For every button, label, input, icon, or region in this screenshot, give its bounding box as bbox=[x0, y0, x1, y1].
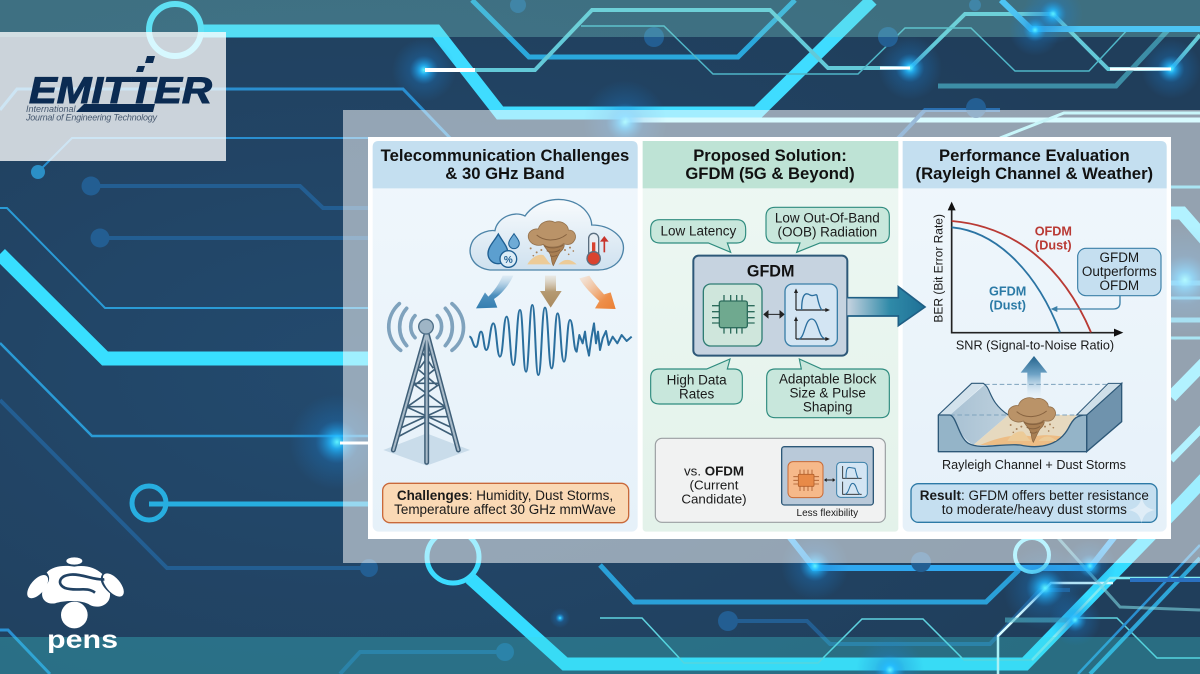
panel: proposed solution bbox=[643, 141, 898, 532]
panel header: Performance Evaluation bbox=[939, 146, 1130, 165]
comparison box: OFDM: vs. OFDM bbox=[684, 464, 744, 479]
arrow: temperature bbox=[579, 276, 616, 309]
panel: performance evaluation bbox=[903, 141, 1167, 532]
callout: challenges: Challenges: Humidity, Dust Storms, bbox=[397, 488, 613, 503]
translucent band top bbox=[0, 0, 1200, 37]
panel: performance evaluation: Rayleigh Channel + Dust Storms bbox=[942, 458, 1126, 472]
icon: humidity drops bbox=[488, 234, 519, 267]
icon: weather cloud bbox=[470, 199, 623, 270]
callout: low out-of-band radiation: (OOB) Radiation bbox=[777, 224, 877, 239]
callout: result bbox=[911, 484, 1157, 523]
signal waveform bbox=[469, 305, 632, 375]
OFDM curve bbox=[952, 221, 1091, 332]
callout: adaptable block size: Shaping bbox=[803, 400, 852, 415]
icon: radio tower bbox=[383, 304, 470, 466]
translucent grey backing panel bbox=[343, 110, 1200, 563]
panel header bbox=[903, 141, 1167, 188]
icon: chip bbox=[703, 284, 762, 346]
callout: GFDM outperforms OFDM: GFDM bbox=[1099, 250, 1139, 265]
logo: EMITTER: International bbox=[26, 104, 77, 114]
callout: low latency bbox=[651, 220, 746, 252]
BER chart: SNR (Signal-to-Noise Ratio) bbox=[956, 338, 1114, 352]
callout: result: Result: GFDM offers better resistance bbox=[920, 488, 1149, 503]
panel body bbox=[643, 141, 898, 532]
callout: adaptable block size: Size & Pulse bbox=[789, 386, 866, 401]
icon: pulse graphs bbox=[785, 284, 837, 346]
icon: humidity drops: % bbox=[504, 255, 513, 266]
callout: result: to moderate/heavy dust storms bbox=[942, 502, 1127, 517]
GFDM block diagram bbox=[693, 256, 847, 356]
icon: signal arcs bbox=[389, 304, 463, 350]
arrow: GFDM to performance bbox=[847, 287, 925, 326]
callout: GFDM outperforms OFDM: OFDM bbox=[1099, 278, 1139, 293]
back wall and sand floor bbox=[938, 383, 1077, 448]
panel header: & 30 GHz Band bbox=[445, 164, 565, 183]
comparison box: OFDM: Candidate) bbox=[681, 492, 747, 507]
arrow: up to chart bbox=[1021, 356, 1047, 397]
icon: thermometer bbox=[587, 233, 609, 265]
comparison box: OFDM bbox=[655, 438, 885, 522]
panel header: GFDM (5G & Beyond) bbox=[685, 164, 855, 183]
BER chart: (Dust) bbox=[989, 299, 1026, 313]
panel header: (Rayleigh Channel & Weather) bbox=[916, 164, 1153, 183]
callout: low out-of-band radiation: Low Out-Of-Band bbox=[775, 210, 880, 225]
BER chart: OFDM bbox=[1035, 225, 1072, 239]
callout: low out-of-band radiation bbox=[766, 207, 889, 252]
callout: high data rates: Rates bbox=[679, 386, 715, 401]
callout: challenges bbox=[383, 483, 629, 523]
BER chart: BER (Bit Error Rate) bbox=[931, 214, 945, 323]
callout: challenges: Temperature affect 30 GHz mmWave bbox=[394, 502, 616, 517]
BER chart: GFDM bbox=[989, 285, 1026, 299]
panel body bbox=[903, 141, 1167, 532]
callout: high data rates bbox=[651, 359, 742, 404]
callout: GFDM outperforms OFDM: Outperforms bbox=[1082, 264, 1157, 279]
logo: PENS: pens bbox=[47, 626, 118, 654]
glows bbox=[289, 0, 1200, 674]
panel header bbox=[643, 141, 898, 188]
callout: high data rates: High Data bbox=[667, 372, 727, 387]
arrow: double bbox=[764, 311, 784, 318]
panel header: Proposed Solution: bbox=[693, 146, 847, 165]
callout: low latency: Low Latency bbox=[660, 224, 736, 239]
GFDM curve bbox=[952, 227, 1060, 332]
icon: dust tornado bbox=[527, 221, 577, 266]
BER chart: (Dust) bbox=[1035, 239, 1072, 253]
dust tornado bbox=[1007, 398, 1057, 442]
panel body bbox=[373, 141, 638, 532]
logo: EMITTER: EMITTER bbox=[29, 70, 212, 111]
arrow: humidity bbox=[476, 276, 513, 308]
callout: adaptable block size bbox=[767, 359, 889, 418]
panel: challenges bbox=[373, 141, 638, 532]
arrow: dust bbox=[540, 276, 562, 308]
comparison box: OFDM: Less flexibility bbox=[797, 508, 858, 519]
GFDM block diagram: GFDM bbox=[747, 263, 794, 281]
logo: EMITTER: Journal of Engineering Technology bbox=[25, 112, 158, 122]
OFDM mini diagram bbox=[782, 447, 873, 505]
translucent band bottom bbox=[0, 637, 1200, 674]
callout: adaptable block size: Adaptable Block bbox=[779, 372, 877, 387]
main white card bbox=[368, 137, 1171, 539]
icon: Rayleigh channel bbox=[938, 383, 1122, 452]
BER chart bbox=[931, 202, 1123, 352]
panel header bbox=[373, 141, 638, 188]
callout: GFDM outperforms OFDM bbox=[1051, 248, 1161, 312]
panel header: Telecommunication Challenges bbox=[381, 146, 629, 165]
logo: EMITTER bbox=[25, 56, 212, 122]
comparison box: OFDM: (Current bbox=[690, 478, 739, 493]
logo: PENS bbox=[23, 557, 128, 654]
logo backing panel bbox=[0, 32, 226, 161]
